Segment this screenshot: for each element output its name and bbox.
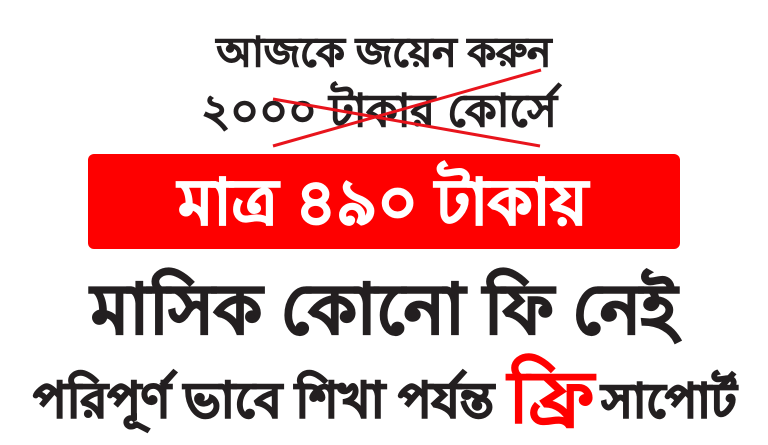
text: free in red: ফ্রি — [508, 358, 594, 438]
price banner — [88, 154, 680, 249]
text: until fully learned: পরিপূর্ণ ভাবে শিখা পর্যন্ত — [33, 374, 494, 428]
heading: join today: আজকে জয়েন করুন — [217, 29, 551, 75]
strike-through cross — [272, 68, 542, 148]
footer line: free support until fully learned — [32, 353, 739, 438]
text: original course price: ২০০০ টাকার কোর্সে — [201, 87, 557, 136]
banner text: only 490 taka: মাত্র ৪৯০ টাকায় — [178, 168, 588, 238]
text: support: সাপোর্ট — [602, 374, 736, 427]
text: no monthly fee: মাসিক কোনো ফি নেই — [91, 271, 677, 348]
